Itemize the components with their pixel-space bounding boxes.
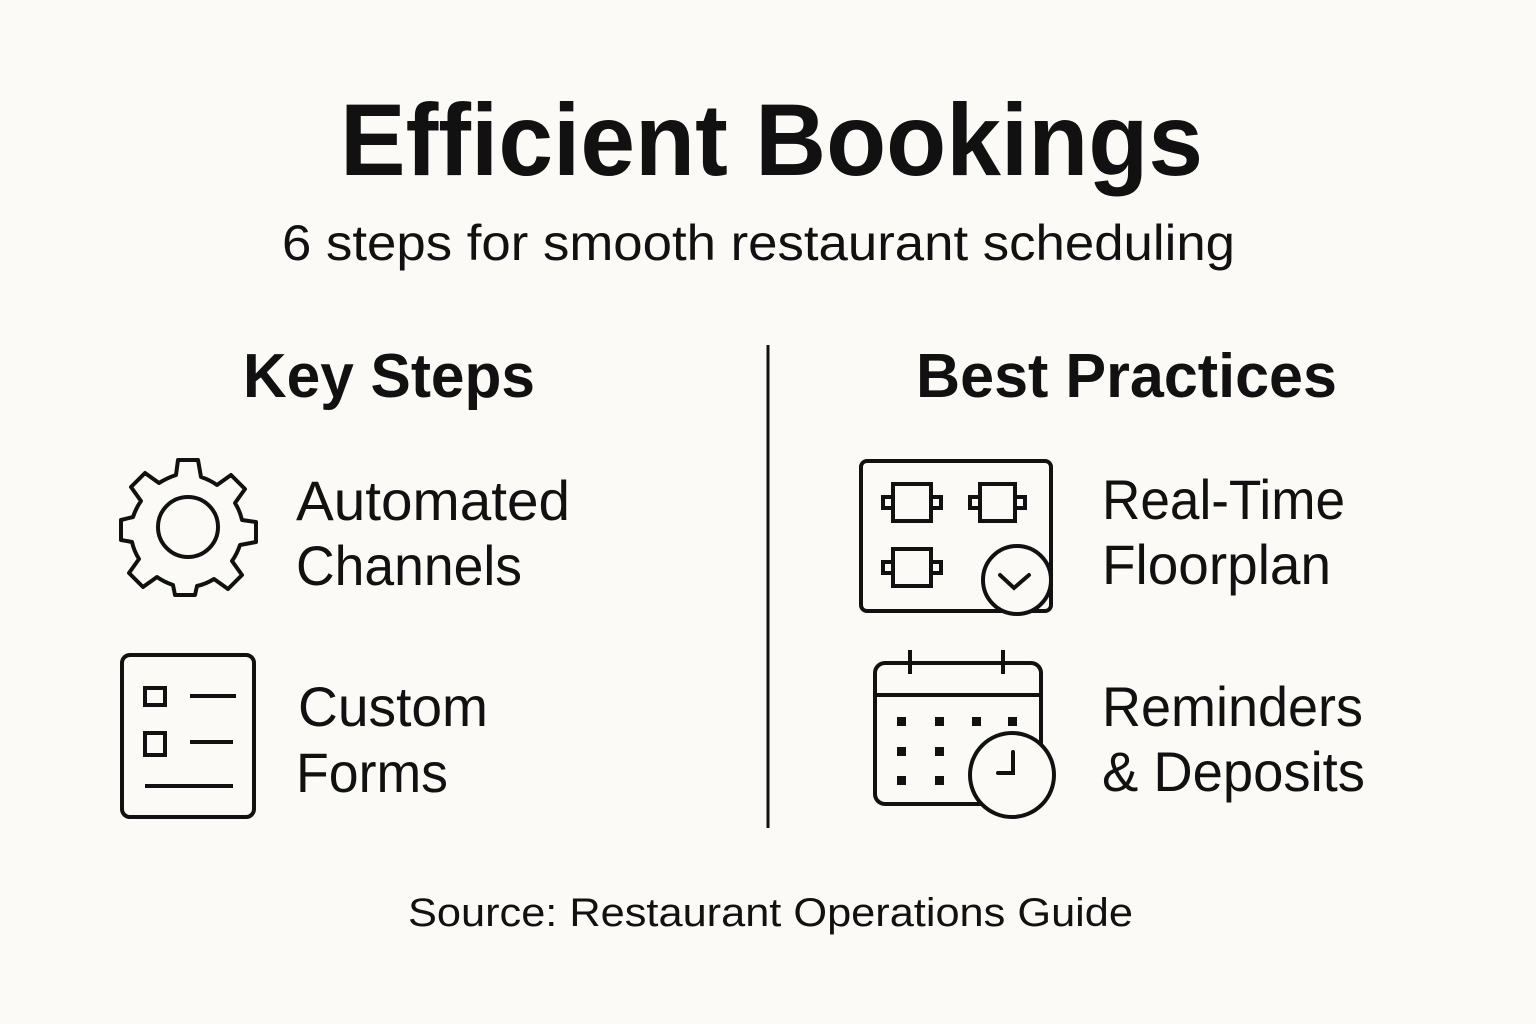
icon: calendar: [875, 650, 1054, 817]
divider: [766, 345, 770, 828]
subtitle: 6 steps for smooth restaurant scheduling: [282, 215, 1235, 271]
source: Source: Restaurant Operations Guide: [408, 891, 1133, 935]
text: & Deposits: [1102, 740, 1365, 803]
icon: form: [122, 655, 254, 817]
heading: key steps: Key Steps: [243, 342, 535, 411]
text: Channels: [296, 534, 522, 597]
icon: gear: [121, 460, 256, 595]
title: Efficient Bookings: [340, 83, 1203, 197]
heading: best practices: Best Practices: [916, 342, 1337, 411]
label: custom forms: Custom: [298, 675, 488, 738]
label: reminders & deposits: Reminders: [1102, 675, 1363, 738]
label: automated channels: Automated: [296, 469, 570, 532]
label: real-time floorplan: Real-Time: [1102, 468, 1345, 531]
text: Floorplan: [1102, 533, 1331, 596]
icon: floorplan: [861, 461, 1051, 614]
text: Forms: [296, 741, 448, 804]
